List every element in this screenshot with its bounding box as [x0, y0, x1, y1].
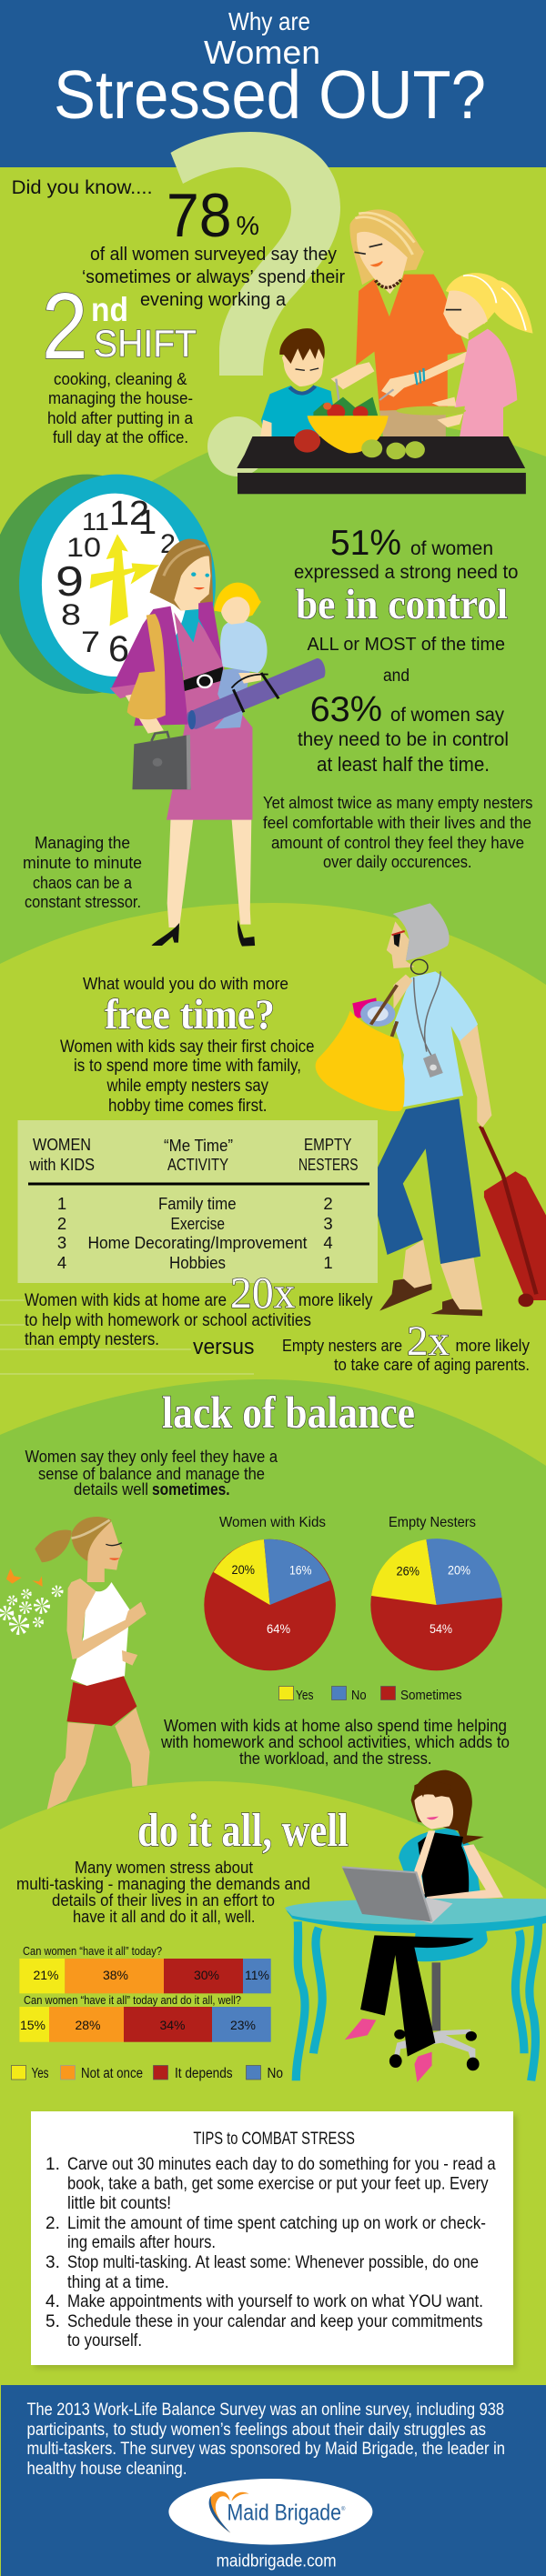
pie chart: women with kids: 64%	[267, 1621, 290, 1636]
section: be in control text: of women	[410, 538, 493, 559]
section: 20x versus 2x: more likely	[298, 1291, 373, 1310]
caption: chaos: Managing the	[35, 833, 130, 852]
section: second shift text: SHIFT	[94, 322, 197, 365]
boy	[260, 328, 393, 436]
hair and face	[150, 539, 213, 611]
tips list: 5.	[46, 2312, 60, 2331]
section: lack of balance text: sense of balance and manage the	[38, 1464, 265, 1483]
bar legend	[11, 2066, 283, 2081]
tips list: Limit the amount of time spent catching up on work or check-	[67, 2214, 486, 2233]
illustration: runner	[6, 1517, 150, 1809]
footer band	[1, 2385, 546, 2576]
caption: chaos: minute to minute	[23, 853, 142, 872]
table header: WOMEN	[33, 1135, 91, 1154]
section: be in control text: be in control	[296, 581, 508, 628]
section: be in control text: amount of control they feel they have	[271, 833, 524, 852]
section: second shift text: 78	[167, 181, 231, 250]
bar legend: No	[268, 2066, 283, 2081]
section: second shift text: full day at the office.	[53, 427, 188, 446]
logo: Maid Brigade: ®	[341, 2506, 346, 2512]
tips list: 4.	[46, 2292, 60, 2311]
footer survey text	[27, 2401, 505, 2479]
tips list: to yourself.	[67, 2331, 142, 2350]
table header: EMPTY	[304, 1135, 351, 1154]
section: be in control text: they need to be in control	[298, 729, 509, 750]
section: second shift text: nd	[91, 291, 128, 328]
stacked bar: have it all	[19, 1945, 271, 1993]
text block: homework: the workload, and the stress.	[239, 1749, 431, 1768]
section: free time text: hobby time comes first.	[108, 1097, 268, 1116]
section: second shift text: evening working a	[140, 289, 287, 310]
bar legend: Not at once	[81, 2066, 143, 2081]
table rows: Exercise	[171, 1214, 225, 1233]
table rows	[57, 1194, 333, 1272]
text block: homework: Women with kids at home also spend time helping	[164, 1716, 507, 1735]
tips list: Make appointments with yourself to work on what YOU want.	[67, 2292, 483, 2311]
table header	[29, 1135, 359, 1174]
bar legend: It depends	[175, 2066, 233, 2081]
pie legend: Yes	[296, 1688, 313, 1703]
girl	[397, 273, 533, 436]
tote bag	[316, 985, 405, 1111]
clock: 10	[66, 533, 101, 563]
belt	[184, 667, 223, 691]
stacked bar: do it all well	[19, 1994, 271, 2042]
tips list: little bit counts!	[67, 2194, 171, 2213]
pie legend: Sometimes	[400, 1688, 462, 1703]
section: 20x versus 2x: versus	[193, 1335, 254, 1359]
table rows: 3	[323, 1214, 333, 1233]
pie chart: empty nesters: 20%	[448, 1563, 470, 1578]
stacked bar: do it all well: 28%	[75, 2018, 101, 2032]
bar legend: Yes	[31, 2066, 49, 2081]
section: 20x versus 2x: Women with kids at home are	[25, 1291, 227, 1310]
section: be in control text: at least half the time.	[317, 753, 490, 776]
tips heading: TIPS to COMBAT STRESS	[193, 2130, 355, 2149]
tips list: Stop multi-tasking. At least some: Whenever possible, do one	[67, 2253, 479, 2272]
caption: chaos: chaos can be a	[33, 873, 133, 892]
tips list: ing emails after hours.	[67, 2233, 216, 2252]
tips list: 1.	[46, 2155, 60, 2174]
section: 20x versus 2x: Empty nesters are	[282, 1336, 402, 1355]
section: free time text: What would you do with more	[83, 974, 288, 993]
pants and shoes	[345, 1935, 473, 2082]
table rows: Family time	[158, 1194, 237, 1213]
head	[387, 903, 450, 974]
pie chart: women with kids: 16%	[289, 1563, 311, 1578]
stacked bar: have it all: Can women “have it all” today?	[23, 1945, 162, 1958]
stacked bar: do it all well: 23%	[230, 2018, 256, 2032]
stacked bar: do it all well: Can women “have it all” today and do it all, well?	[24, 1994, 241, 2007]
dress	[167, 612, 252, 820]
section: second shift text	[12, 177, 345, 446]
title	[54, 7, 486, 133]
illustration: family cooking	[237, 209, 533, 494]
title: Women	[204, 34, 320, 71]
table	[285, 1899, 546, 2080]
section: 20x versus 2x: than empty nesters.	[25, 1330, 159, 1349]
logo: Maid Brigade: Maid Brigade	[228, 2501, 341, 2526]
section: 20x versus 2x: 20x	[230, 1268, 295, 1318]
section: 20x versus 2x: more likely	[455, 1336, 531, 1355]
stacked bar: have it all: 11%	[245, 1968, 269, 1982]
clock: 12	[109, 495, 149, 533]
section: be in control text: feel comfortable with their lives and the	[263, 813, 531, 832]
laptop	[342, 1867, 453, 1923]
yoga mat	[187, 658, 325, 729]
legs	[167, 818, 193, 927]
section: do it all well text: have it all and do it all, well.	[73, 1907, 255, 1926]
section: 20x versus 2x: to take care of aging parents.	[334, 1355, 530, 1374]
section: second shift text: 2	[42, 274, 87, 378]
clock: 8	[61, 598, 81, 631]
table header: “Me Time”	[164, 1136, 233, 1155]
section: free time text: while empty nesters say	[106, 1077, 268, 1096]
pie chart: women with kids	[204, 1515, 336, 1670]
panel: tips	[31, 2111, 517, 2369]
pie chart: empty nesters	[370, 1515, 502, 1670]
table rows: 2	[323, 1194, 333, 1213]
table rows: 4	[323, 1233, 333, 1252]
table rows: Hobbies	[169, 1253, 226, 1272]
text block: homework: with homework and school activities, which adds to	[160, 1732, 510, 1751]
section: do it all well text: do it all, well	[137, 1805, 349, 1857]
illustration: mother with baby	[110, 539, 325, 927]
section: be in control text: of women say	[390, 705, 504, 726]
section: lack of balance text: details well	[74, 1479, 148, 1498]
clock: 7	[81, 626, 100, 658]
section: 20x versus 2x: to help with homework or school activities	[25, 1311, 311, 1330]
table header: with KIDS	[29, 1155, 95, 1174]
stacked bar: do it all well: 34%	[159, 2018, 186, 2032]
pie chart: empty nesters: Empty Nesters	[389, 1515, 476, 1530]
text block: homework	[160, 1716, 510, 1768]
caption: chaos: constant stressor.	[25, 892, 141, 911]
title: Stressed OUT?	[54, 56, 486, 133]
section: lack of balance text: Women say they only feel they have a	[25, 1447, 278, 1466]
section: 20x versus 2x	[25, 1268, 531, 1374]
baby	[214, 583, 268, 729]
tips list	[46, 2155, 496, 2350]
footer survey text: healthy house cleaning.	[27, 2460, 187, 2479]
icon: daisies	[2, 1588, 60, 1630]
table	[237, 436, 525, 468]
pie chart: women with kids: 20%	[231, 1562, 255, 1577]
suitcase	[480, 1126, 546, 1307]
section: second shift text: cooking, cleaning &	[54, 369, 187, 388]
tips list: Carve out 30 minutes each day to do something for you - read a	[67, 2155, 496, 2174]
pie chart: women with kids: Women with Kids	[219, 1515, 326, 1530]
stacked bar: have it all: 21%	[33, 1968, 59, 1982]
briefcase	[132, 732, 191, 789]
salad bowl	[294, 397, 425, 459]
section: free time text: free time?	[105, 991, 275, 1038]
section: free time text	[60, 974, 315, 1116]
tips list: thing at a time.	[67, 2273, 169, 2292]
table header: NESTERS	[298, 1155, 359, 1174]
clock	[0, 475, 216, 694]
stacked bar: have it all: 30%	[194, 1968, 219, 1982]
section: second shift text: managing the house-	[48, 388, 193, 407]
table header: ACTIVITY	[167, 1155, 228, 1174]
table rows: 1	[323, 1253, 333, 1272]
panel: me time table	[18, 1120, 378, 1283]
section: be in control text	[263, 524, 533, 871]
title: Why are	[228, 7, 310, 35]
tips list: 3.	[46, 2253, 60, 2272]
pie legend: No	[351, 1688, 367, 1703]
head and body	[411, 1770, 503, 1902]
mother	[331, 209, 467, 436]
pie chart: empty nesters: 26%	[397, 1564, 420, 1579]
section: free time text: is to spend more time with family,	[74, 1057, 301, 1076]
section: be in control text: 63%	[310, 690, 382, 729]
section: do it all well text: details of their lives in an effort to	[52, 1890, 275, 1909]
table rows: 2	[57, 1214, 66, 1233]
illustration: traveling woman	[316, 903, 546, 1316]
tips list: 2.	[46, 2214, 60, 2233]
clock: 1	[138, 504, 157, 542]
section: second shift text: ‘sometimes or always’ spend their	[82, 266, 345, 287]
section: second shift text: hold after putting in a	[47, 408, 194, 427]
icon: giant question mark	[171, 132, 340, 476]
section: be in control text: over daily occurences.	[323, 852, 471, 871]
section: second shift text: %	[237, 212, 259, 241]
table rows: 4	[57, 1253, 66, 1272]
tips list: Schedule these in your calendar and keep your commitments	[67, 2312, 482, 2331]
section: second shift text: Did you know....	[12, 177, 153, 198]
tips list: book, take a bath, get some exercise or put your feet up. Every	[67, 2175, 489, 2193]
section: be in control text: expressed a strong need to	[294, 562, 519, 583]
table rows: Home Decorating/Improvement	[87, 1233, 308, 1252]
chair	[389, 1828, 488, 2070]
illustration: woman at desk	[285, 1770, 546, 2082]
caption: chaos	[23, 833, 142, 911]
icon: heart swoosh	[209, 2491, 249, 2533]
clock: 2	[160, 529, 176, 559]
section: lack of balance text	[25, 1387, 415, 1498]
stacked bar: have it all: 38%	[103, 1968, 128, 1982]
pie legend	[278, 1686, 462, 1703]
section: do it all well text: multi-tasking - managing the demands and	[16, 1874, 310, 1893]
clock: 6	[108, 629, 129, 669]
section: do it all well text	[16, 1805, 349, 1926]
section: lack of balance text: sometimes.	[152, 1479, 230, 1498]
section: 20x versus 2x: 2x	[407, 1318, 450, 1365]
pie chart: empty nesters: 54%	[430, 1621, 452, 1636]
header band	[0, 0, 546, 167]
logo: Maid Brigade	[168, 2479, 372, 2545]
section: be in control text: and	[383, 667, 410, 686]
section: second shift text: of all women surveyed say they	[90, 244, 338, 265]
website: maidbrigade.com	[217, 2552, 337, 2571]
table rows: 3	[57, 1233, 66, 1252]
footer survey text: participants, to study women’s feelings about their daily struggles as	[27, 2421, 486, 2440]
jacket	[111, 606, 188, 726]
section: be in control text: 51%	[330, 524, 401, 563]
section: be in control text: ALL or MOST of the time	[308, 634, 505, 655]
table rows: 1	[57, 1194, 66, 1213]
section: do it all well text: Many women stress about	[75, 1858, 253, 1877]
illustration: high heels	[151, 920, 255, 947]
clock: 9	[56, 557, 84, 605]
section: free time text: Women with kids say their first choice	[60, 1037, 315, 1057]
clock: 11	[82, 507, 109, 536]
stacked bar: do it all well: 15%	[20, 2018, 46, 2032]
section: lack of balance text: lack of balance	[162, 1387, 415, 1438]
shoulder bag	[127, 614, 166, 719]
